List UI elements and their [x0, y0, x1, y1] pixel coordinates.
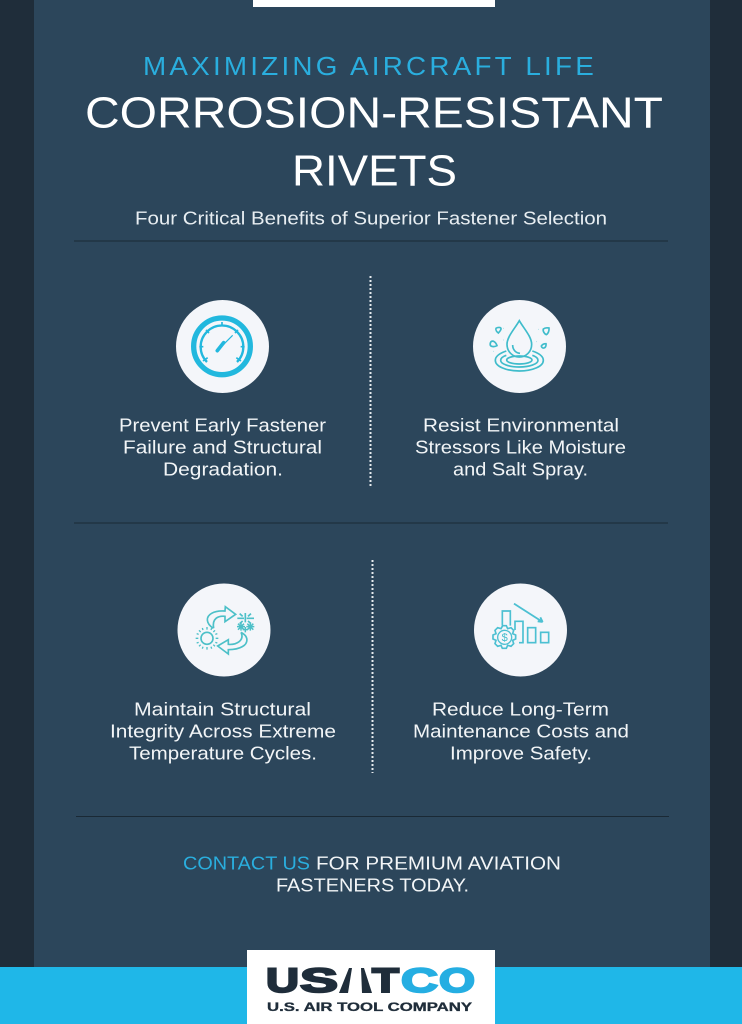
benefit text 3: Integrity Across Extreme: [110, 722, 336, 742]
dollar sign: $: [502, 632, 508, 644]
benefit text 3: Temperature Cycles.: [129, 744, 317, 764]
call to action: CONTACT US: [183, 854, 310, 874]
logo: USATCO: [247, 950, 495, 1024]
icon: gauge: [176, 300, 269, 393]
benefit text 3: [110, 700, 336, 764]
icon: water drop with ripples: [473, 300, 566, 393]
logo: USATCO: T: [372, 962, 399, 1000]
logo: USATCO: S: [300, 962, 338, 1000]
benefit text 2: Resist Environmental: [423, 416, 619, 436]
logo: USATCO: C: [401, 962, 438, 1000]
benefit text 1: Prevent Early Fastener: [119, 416, 326, 436]
eyebrow heading: MAXIMIZING AIRCRAFT LIFE: [143, 51, 597, 81]
icon: falling bars with dollar gear: [474, 584, 567, 676]
benefit text 1: [119, 416, 326, 480]
call to action: [183, 854, 561, 896]
logo: USATCO: U.S. AIR TOOL COMPANY: [267, 1002, 472, 1014]
title: [85, 88, 663, 196]
subtitle: Four Critical Benefits of Superior Fastener Selection: [135, 208, 607, 228]
top white tab: [253, 0, 495, 7]
benefit text 4: Maintenance Costs and: [413, 722, 629, 742]
call to action: FASTENERS TODAY.: [276, 876, 469, 896]
benefit text 4: Improve Safety.: [450, 744, 592, 764]
call to action: FOR PREMIUM AVIATION: [316, 854, 561, 874]
benefit text 2: [415, 416, 626, 480]
benefit text 3: Maintain Structural: [134, 700, 311, 720]
benefit text 4: Reduce Long-Term: [432, 700, 609, 720]
title: RIVETS: [292, 146, 457, 196]
benefit text 1: Degradation.: [163, 460, 283, 480]
benefit: prevent early failure: [119, 300, 326, 480]
benefit text 2: and Salt Spray.: [453, 460, 588, 480]
bottom blue band: [0, 967, 742, 1024]
benefit: resist environmental stressors: [415, 300, 626, 480]
logo: USATCO: O: [439, 962, 475, 1000]
icon: sun and snowflake cycle: [178, 584, 270, 676]
benefit: maintain structural integrity: [110, 584, 336, 764]
benefit text 2: Stressors Like Moisture: [415, 438, 626, 458]
title: CORROSION-RESISTANT: [85, 88, 663, 138]
benefit text 1: Failure and Structural: [123, 438, 322, 458]
logo: USATCO: U: [266, 962, 299, 1000]
benefit text 4: [413, 700, 629, 764]
benefit: reduce maintenance costs: [413, 584, 629, 764]
